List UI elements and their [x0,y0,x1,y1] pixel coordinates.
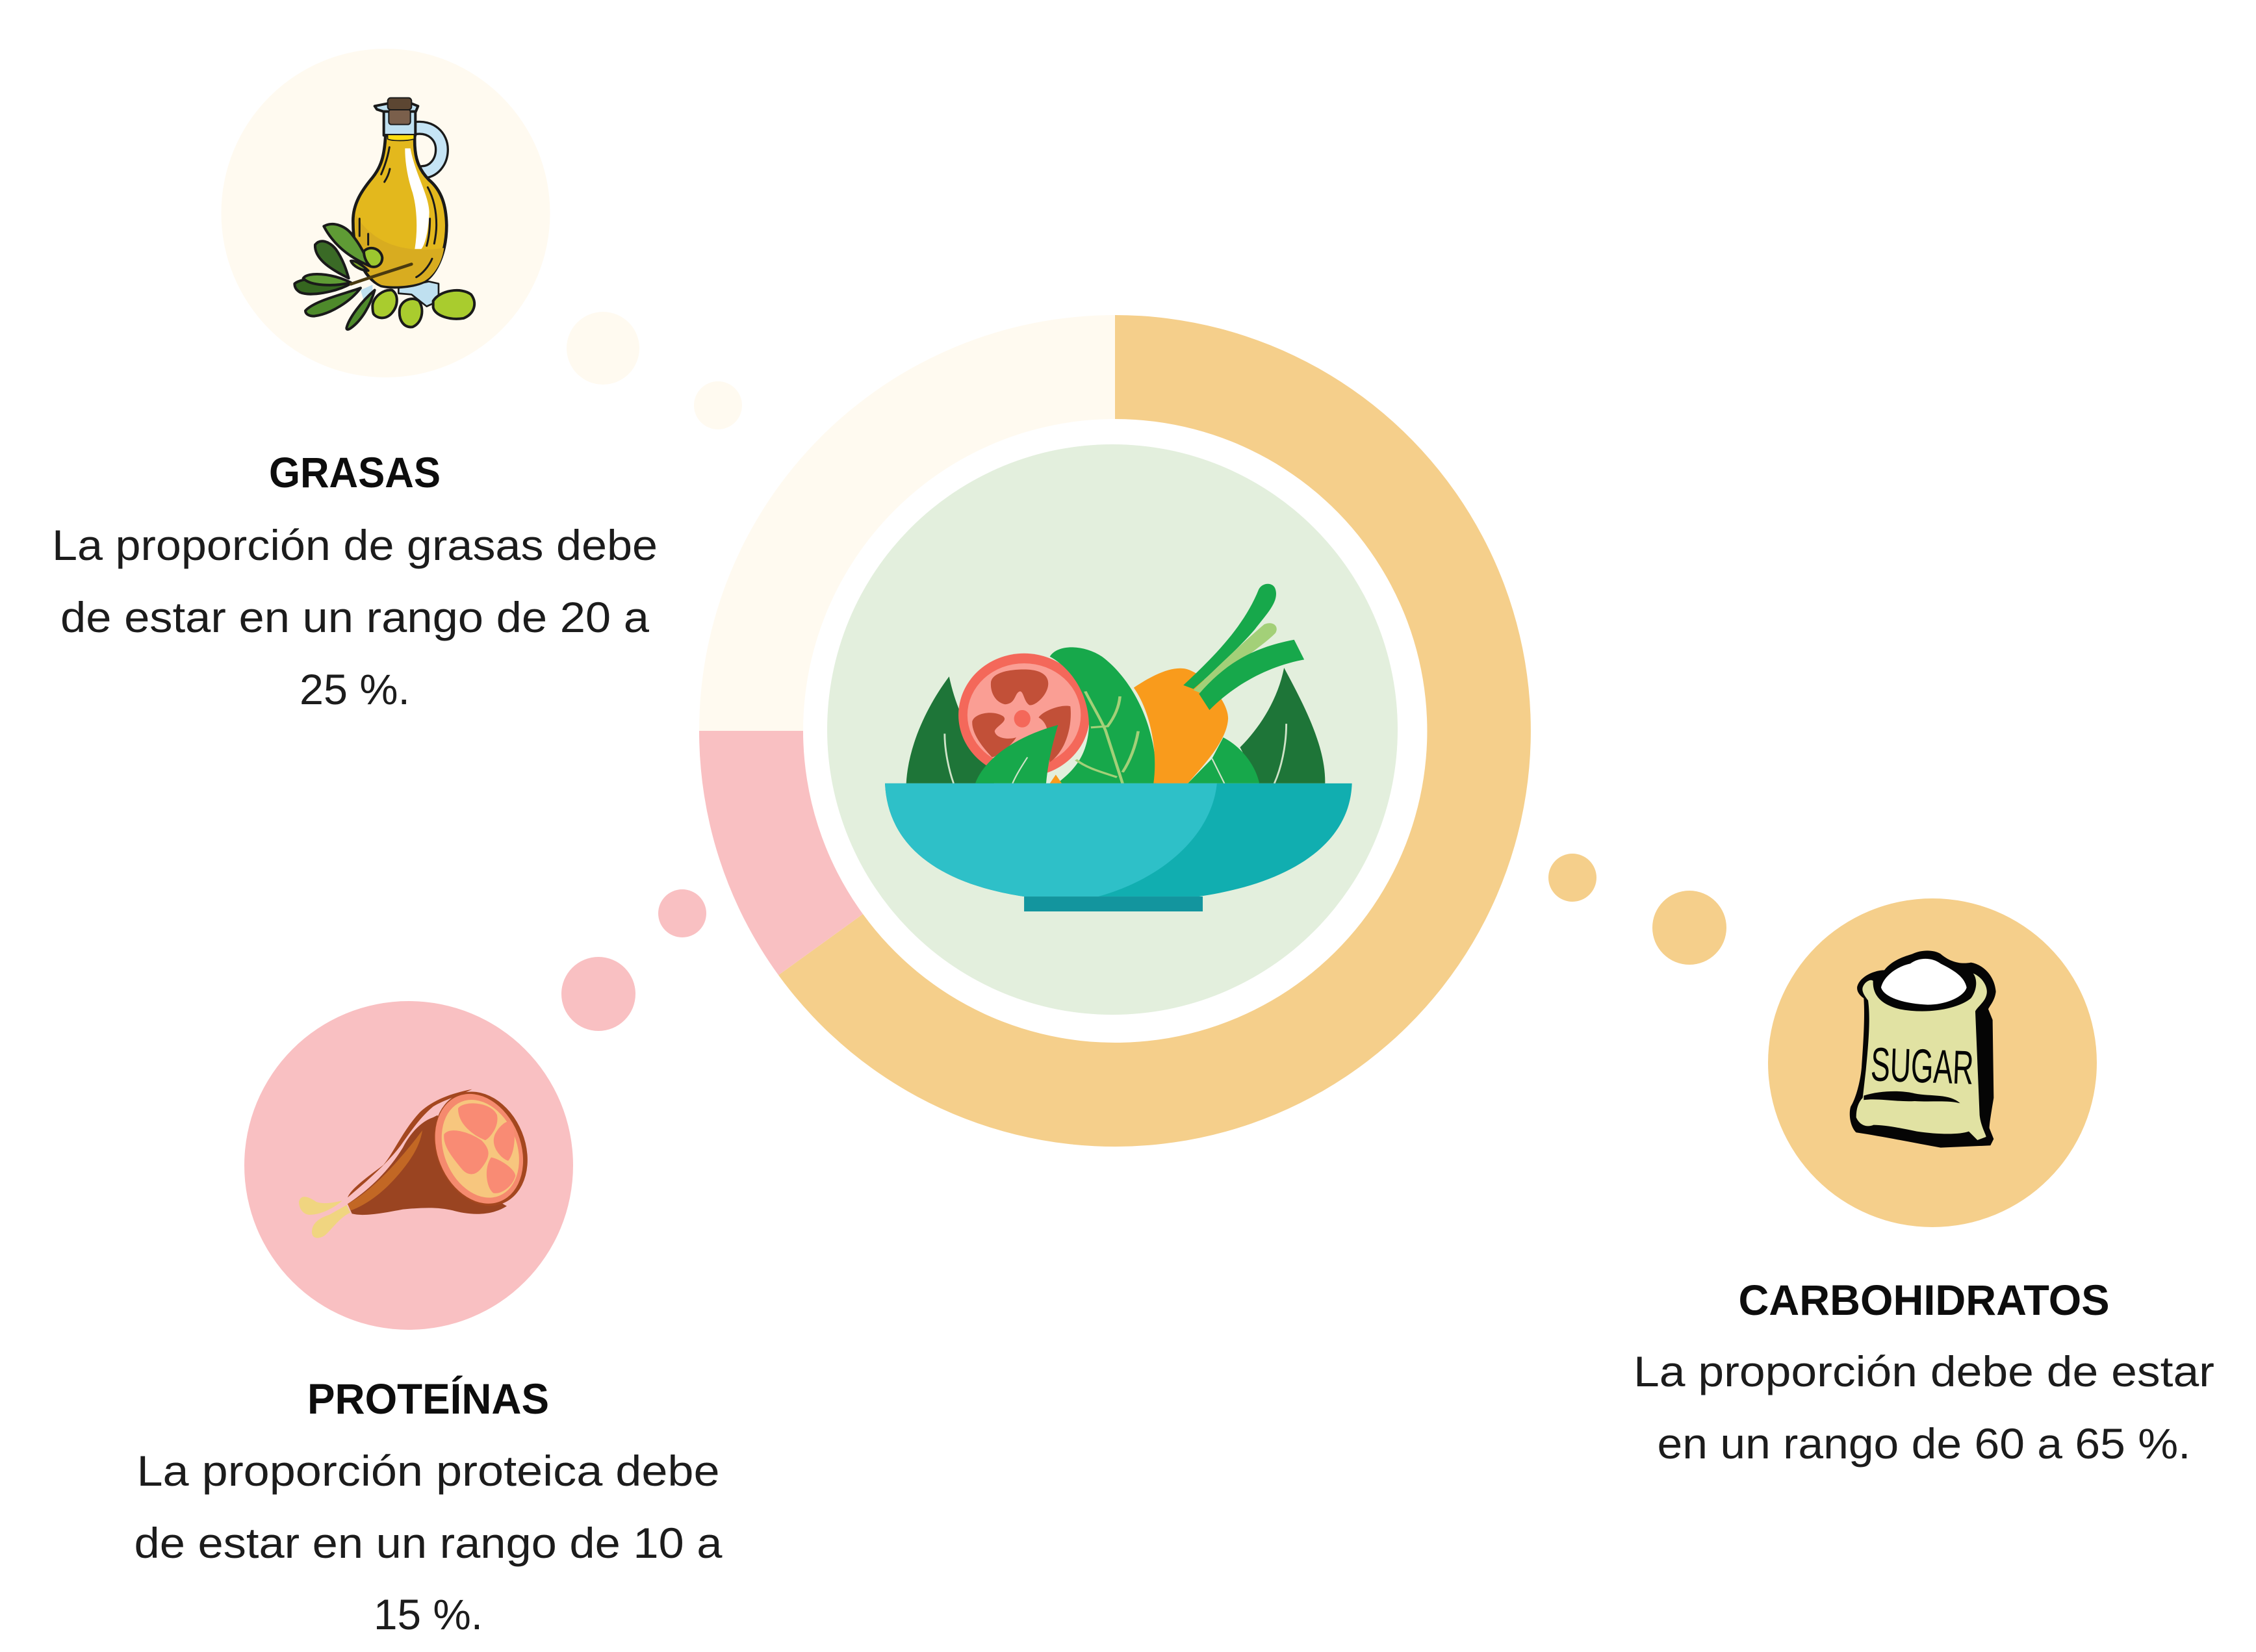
segment: carbohidratos [778,315,1531,1147]
connector dots [561,889,706,1031]
carbohidratos circle [1768,898,2097,1227]
proteínas description: de estar en un rango de 10 a [134,1519,723,1567]
proteínas description: La proporción proteica debe [136,1447,720,1495]
large spinach leaf [1050,647,1156,783]
grasas description [52,521,658,713]
carrot [1134,668,1228,783]
segment: proteínas [699,731,863,975]
proteínas description: 15 %. [374,1590,483,1638]
proteínas description [134,1447,723,1638]
icon: sugar sack [1850,950,1996,1148]
grasas description: de estar en un rango de 20 a [60,593,649,641]
carbohidratos description [1634,1347,2214,1468]
carbohidratos description: La proporción debe de estar [1634,1347,2214,1395]
ham cut face [418,1078,544,1220]
grasas circle [221,49,550,377]
front leaf [975,725,1058,783]
panel: proteínas [134,889,723,1638]
carbohidratos heading: CARBOHIDRATOS [1739,1276,2109,1324]
bowl base [1024,896,1203,911]
panel: carbohidratos [1548,854,2214,1468]
icon: sugar sack: SUGAR [1870,1037,1975,1095]
connector dots [567,312,742,429]
icon: olive oil bottle [294,98,474,329]
center circle [827,444,1398,1015]
icon: ham [299,1078,544,1238]
right dark leaf [1240,668,1325,783]
grasas heading: GRASAS [269,448,441,496]
panel: grasas [52,49,742,713]
grasas description: La proporción de grasas debe [52,521,658,569]
connector dots [1548,854,1726,965]
carrot greens [1183,584,1304,710]
grasas description: 25 %. [300,665,410,713]
proteínas circle [244,1001,573,1330]
donut chart [699,315,1531,1147]
left dark leaf [906,676,994,783]
segment: grasas [699,315,1115,731]
proteínas heading: PROTEÍNAS [307,1375,549,1423]
icon: salad bowl [885,584,1352,911]
front right leaf [1188,737,1259,783]
tomato [958,654,1090,777]
carbohidratos description: en un rango de 60 a 65 %. [1657,1419,2191,1468]
bowl [885,783,1352,896]
